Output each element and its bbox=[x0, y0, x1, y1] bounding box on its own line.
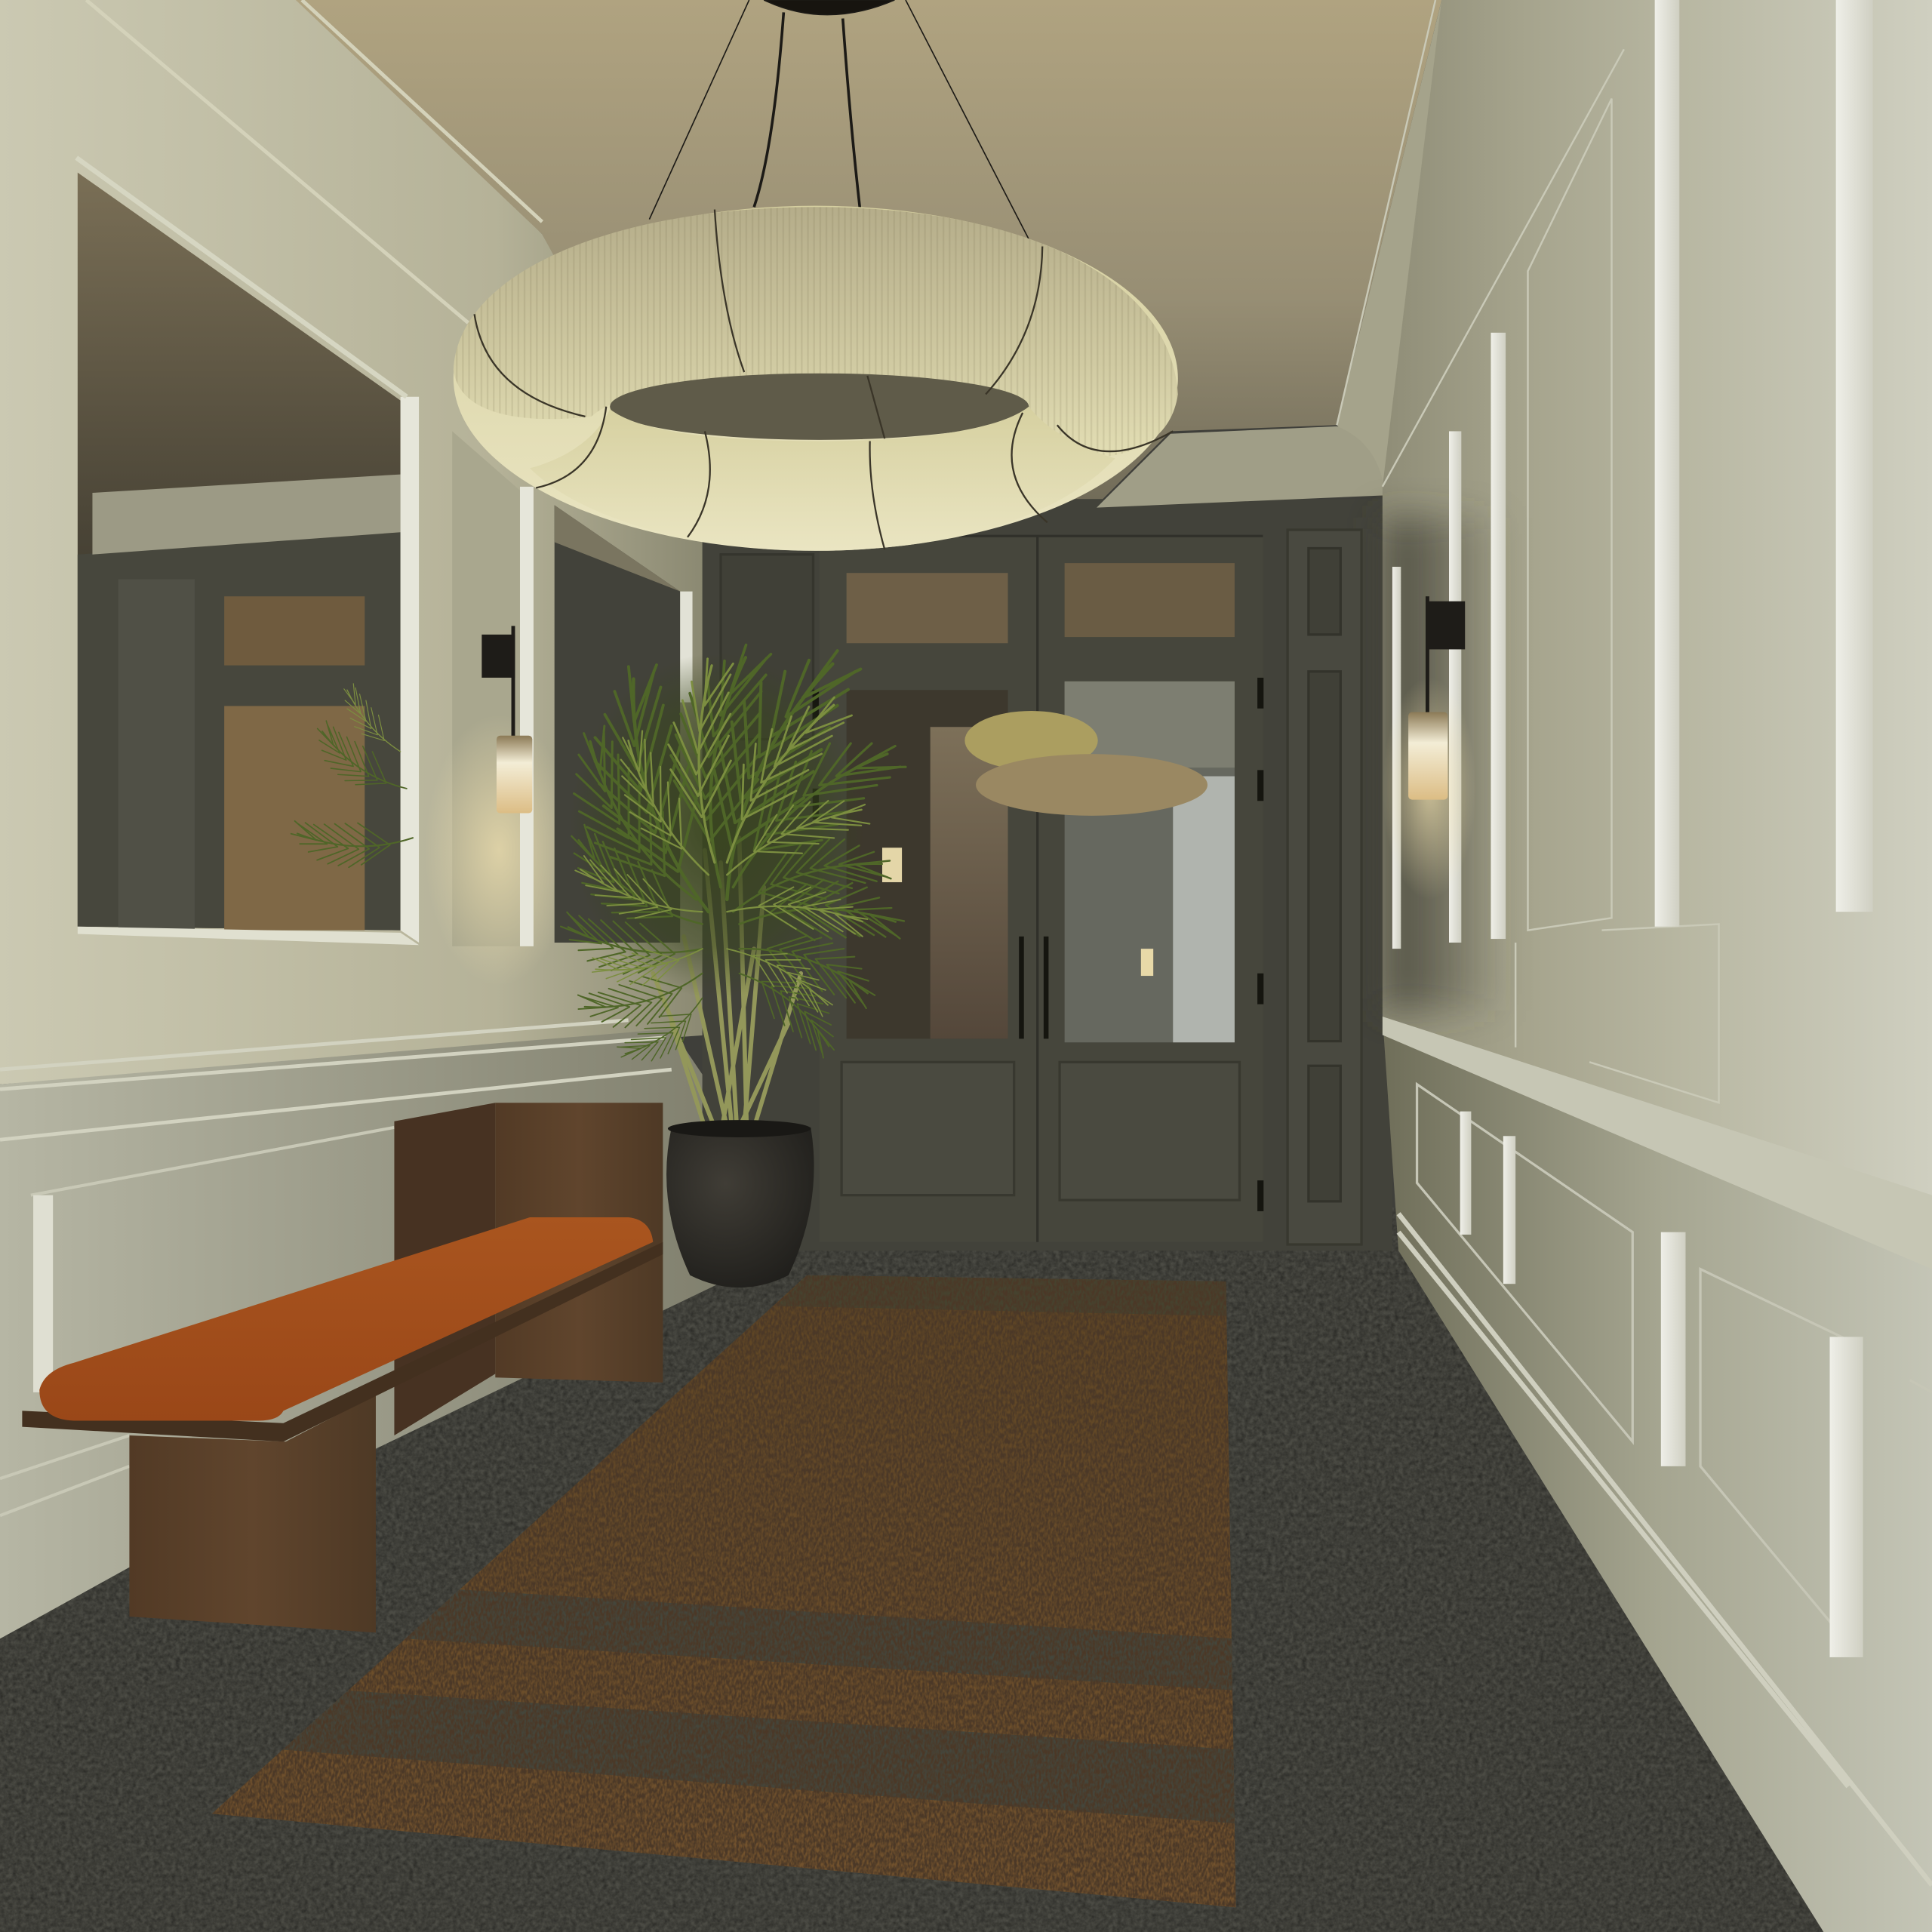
lamp canopy and cables bbox=[649, 0, 1032, 247]
bench bbox=[22, 1103, 663, 1632]
plant fronds bbox=[291, 623, 911, 1079]
left wall bbox=[0, 0, 814, 1638]
door assembly bbox=[721, 530, 1361, 1244]
back wall bbox=[703, 499, 1392, 1251]
bench back rest bbox=[394, 1103, 663, 1435]
wall pier with sconce glow bbox=[425, 431, 573, 986]
lamp torus bbox=[454, 206, 1180, 551]
second mirror bbox=[555, 505, 693, 943]
rug bbox=[197, 1269, 1257, 1922]
bench seat board bbox=[22, 1242, 663, 1441]
left wall mirror bbox=[76, 158, 419, 945]
ceiling bbox=[284, 0, 1441, 542]
pendant lamp bbox=[454, 0, 1180, 551]
bench cushion bbox=[39, 1217, 653, 1420]
bench front leg bbox=[129, 1395, 376, 1632]
left sconce bbox=[481, 626, 532, 814]
floor bbox=[0, 1208, 1932, 1932]
plant stems bbox=[653, 838, 801, 1128]
right sconce bbox=[1383, 596, 1476, 900]
right ceiling cornice bbox=[1337, 0, 1638, 487]
right wall white panel strips bbox=[1392, 0, 1873, 1657]
lamp seams bbox=[475, 210, 1173, 549]
vase bbox=[666, 1120, 814, 1287]
ceiling cove above door bbox=[1097, 426, 1385, 508]
right wall bbox=[1337, 0, 1932, 1932]
